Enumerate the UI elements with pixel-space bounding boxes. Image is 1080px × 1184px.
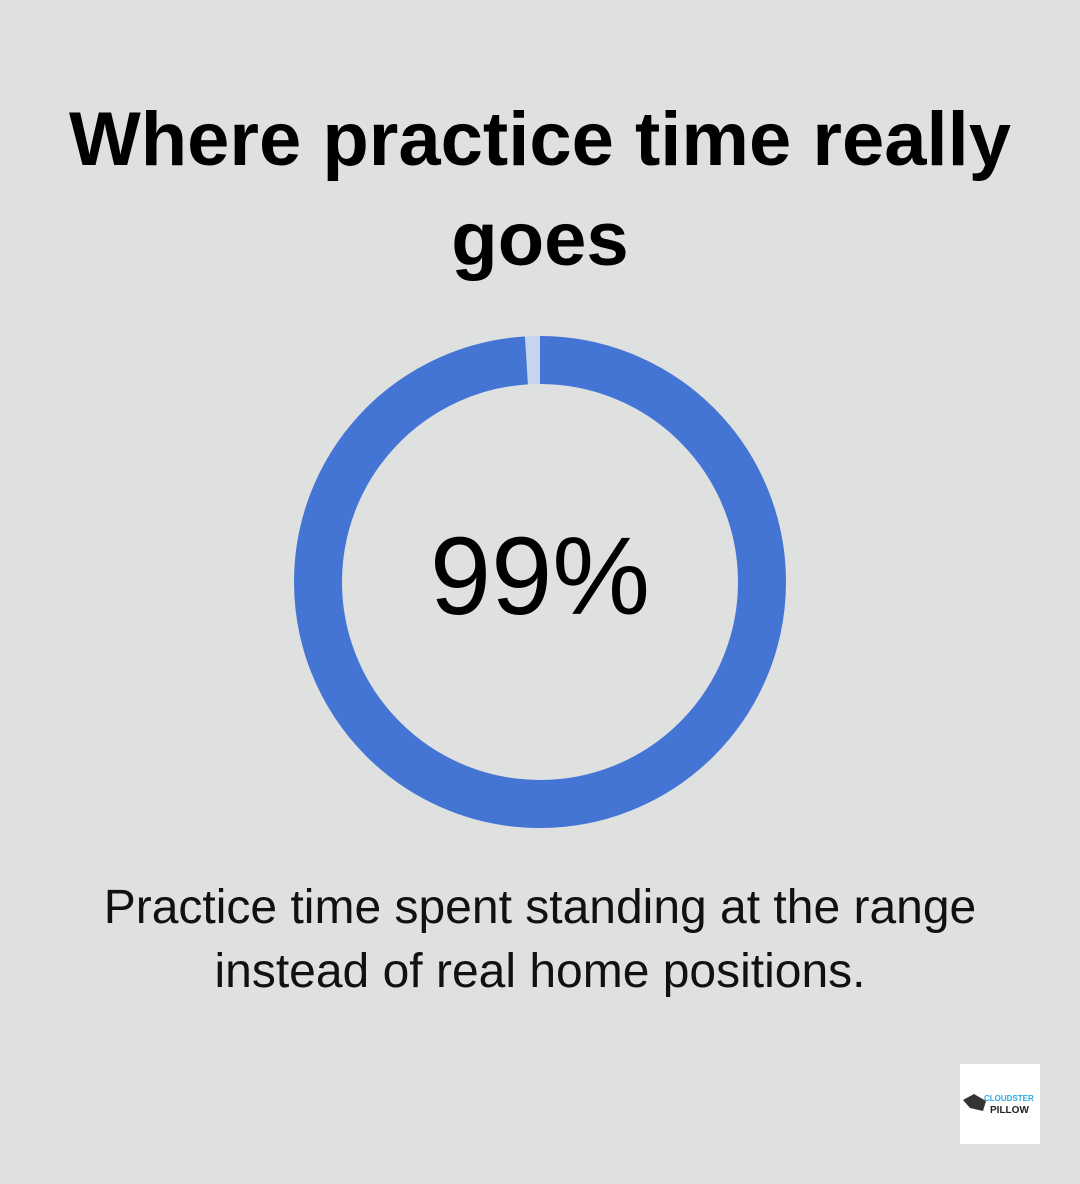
icon: pillow — [963, 1094, 986, 1111]
title — [69, 97, 1011, 282]
center value: 99% — [430, 515, 650, 638]
logo: PILLOW — [990, 1105, 1029, 1116]
caption: Practice time spent standing at the range — [104, 881, 976, 934]
caption — [104, 881, 976, 998]
ring background (remaining 1%) — [318, 360, 762, 804]
ring value arc 99% — [318, 360, 762, 804]
title: goes — [451, 197, 629, 282]
caption: instead of real home positions. — [214, 945, 866, 998]
logo: CLOUDSTER — [984, 1094, 1034, 1103]
logo — [960, 1064, 1040, 1144]
title: Where practice time really — [69, 97, 1011, 182]
